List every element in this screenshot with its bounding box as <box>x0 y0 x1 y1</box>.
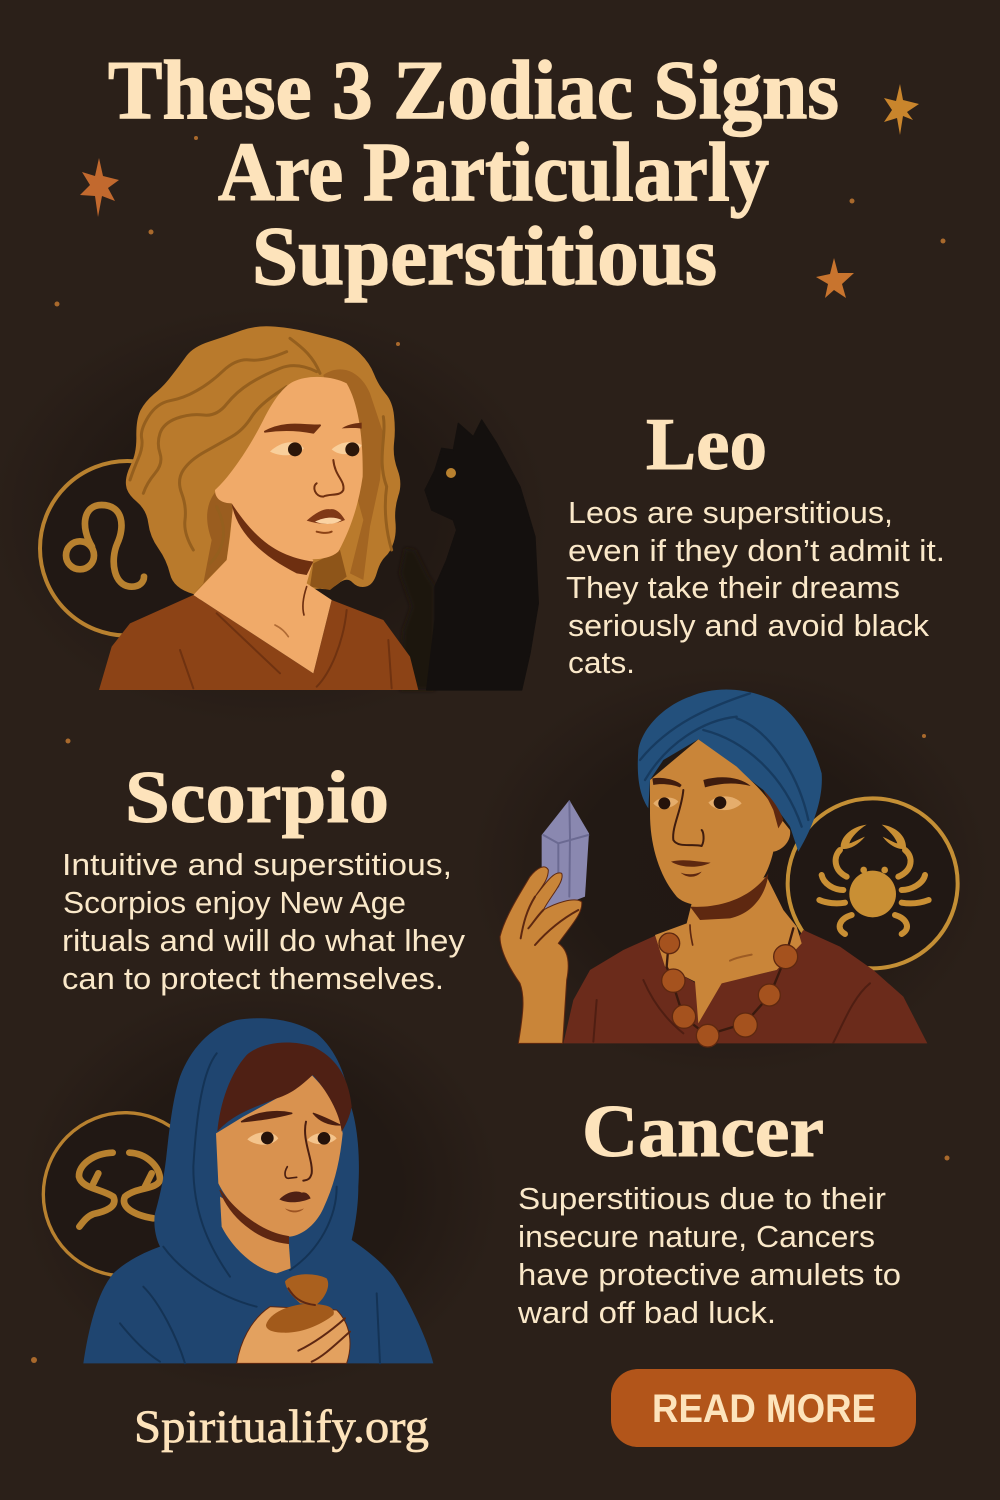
turban folds <box>640 693 808 827</box>
neck <box>220 1197 291 1273</box>
Scorpio description: Intuitive and superstitious, <box>62 847 452 882</box>
hair <box>217 1043 352 1132</box>
Scorpio description: rituals and will do what lhey <box>62 923 466 958</box>
Leo zodiac circle <box>40 461 215 636</box>
Cancer description: have protective amulets to <box>518 1257 901 1292</box>
neck <box>655 877 802 1023</box>
illustration: Leo woman with black cat <box>40 326 538 690</box>
shirt folds <box>593 980 870 1043</box>
Cancer description: Superstitious due to their <box>518 1181 886 1216</box>
Leo description: cats. <box>568 645 635 680</box>
title <box>108 44 839 303</box>
jaw shadow <box>220 1190 288 1243</box>
jaw shadow <box>690 873 768 920</box>
decorative stars and dots <box>31 84 950 1363</box>
face features <box>652 777 752 961</box>
Cancer heading: Cancer <box>582 1091 824 1173</box>
jaw shadow <box>232 503 313 575</box>
Leo heading: Leo <box>646 404 767 486</box>
face <box>216 1075 343 1237</box>
Leo description <box>566 495 945 680</box>
cloak folds <box>120 1053 380 1363</box>
shirt folds <box>180 610 392 688</box>
face features <box>265 423 362 637</box>
title: Superstitious <box>252 210 717 303</box>
Cancer zodiac circle with crab <box>788 798 958 968</box>
title: Are Particularly <box>218 126 769 219</box>
Scorpio zodiac circle <box>43 1113 207 1276</box>
read more button: READ MORE <box>652 1387 876 1431</box>
neck <box>193 503 332 673</box>
Leo description: Leos are superstitious, <box>568 495 893 530</box>
read more button <box>611 1369 916 1447</box>
Scorpio description <box>62 847 466 996</box>
Scorpio description: Scorpios enjoy New Age <box>63 885 406 920</box>
bead necklace <box>659 928 798 1047</box>
black cat <box>400 420 538 690</box>
Cancer description <box>517 1181 901 1330</box>
hair shadow panels <box>323 369 383 580</box>
hand <box>500 867 582 1043</box>
crystal <box>542 800 589 913</box>
face <box>215 377 363 559</box>
Scorpio description: can to protect themselves. <box>62 961 444 996</box>
Cancer description: insecure nature, Cancers <box>518 1219 875 1254</box>
Cancer description: ward off bad luck. <box>517 1295 776 1330</box>
hair strands <box>130 338 392 563</box>
shirt <box>563 930 927 1043</box>
title: These 3 Zodiac Signs <box>108 44 839 137</box>
turban <box>638 690 822 852</box>
hood and cloak <box>83 1018 433 1363</box>
amulet pouch and hand <box>237 1274 350 1363</box>
background shadows <box>0 305 990 1395</box>
website name: Spiritualify.org <box>134 1401 429 1453</box>
Leo description: They take their dreams <box>566 570 900 605</box>
illustration: man with turban and crystal <box>500 690 958 1047</box>
Leo description: seriously and avoid black <box>568 608 930 643</box>
Scorpio heading: Scorpio <box>125 757 389 839</box>
Leo description: even if they don’t admit it. <box>568 533 945 568</box>
shirt <box>99 595 418 690</box>
hair <box>126 326 400 594</box>
face features <box>242 1112 340 1212</box>
illustration: hooded woman with amulet <box>43 1018 433 1363</box>
face <box>650 739 790 906</box>
